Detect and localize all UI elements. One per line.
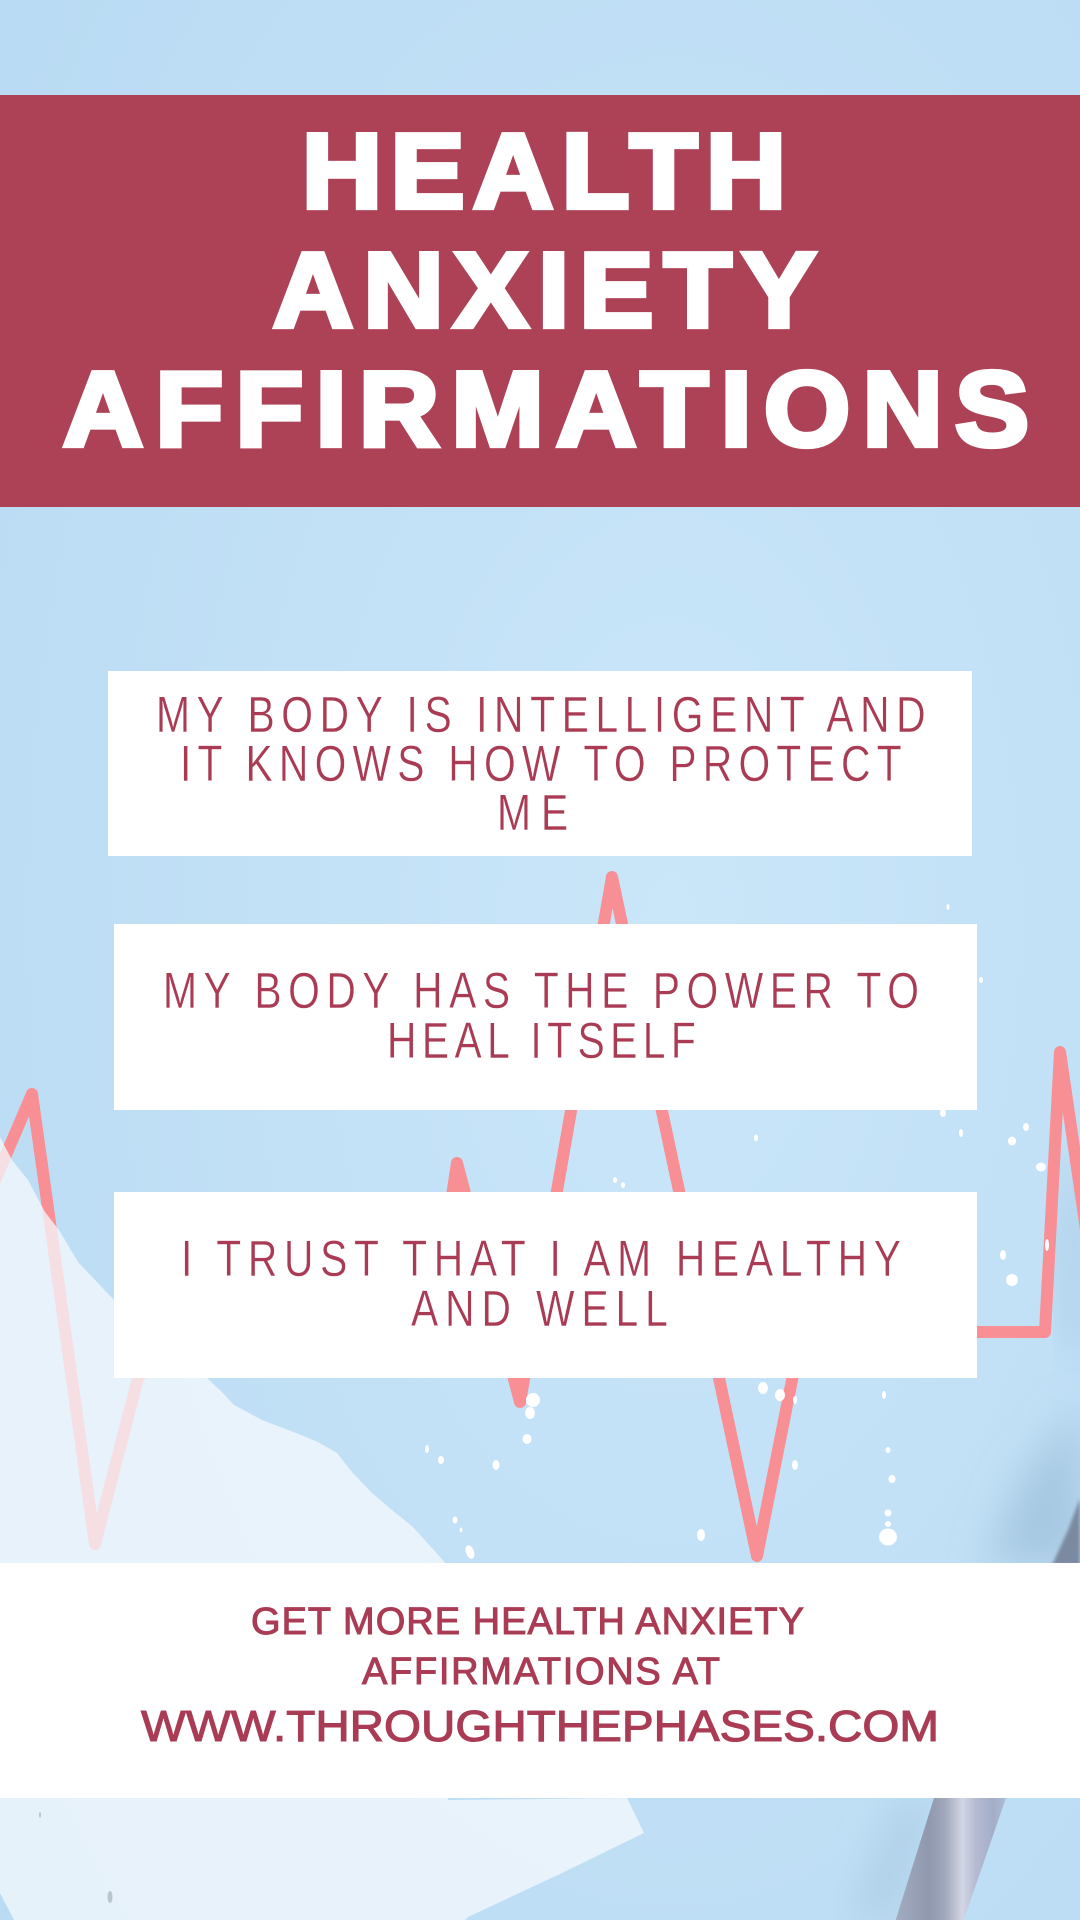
affirmation card 1: MY BODY IS INTELLIGENT AND [156, 686, 926, 743]
stethoscope tube [850, 1795, 1007, 1920]
footer call to action: GET MORE HEALTH ANXIETY [251, 1601, 804, 1643]
affirmation card 2 [114, 924, 977, 1110]
affirmation card 1: IT KNOWS HOW TO PROTECT [180, 735, 902, 792]
title text: HEALTH [302, 112, 786, 230]
title text: ANXIETY [273, 231, 816, 349]
affirmation card 3: AND WELL [411, 1280, 668, 1337]
footer call to action [0, 1563, 1080, 1798]
footer call to action: WWW.THROUGHTHEPHASES.COM [141, 1702, 939, 1751]
title text [63, 112, 1029, 468]
affirmation card 2: HEAL ITSELF [387, 1012, 696, 1069]
specks on paper [39, 1812, 112, 1903]
affirmation card 1 [108, 671, 972, 856]
affirmation card 2: MY BODY HAS THE POWER TO [163, 962, 919, 1019]
title text: AFFIRMATIONS [63, 350, 1029, 468]
torn paper shape [0, 1137, 644, 1920]
affirmation card 1: ME [497, 784, 568, 841]
heartbeat line [0, 877, 1080, 1556]
footer call to action: AFFIRMATIONS AT [362, 1651, 720, 1693]
affirmation card 3 [114, 1192, 977, 1378]
paint splatter dots [425, 904, 1049, 1560]
title banner [0, 95, 1080, 507]
stethoscope shadow at right edge [985, 1130, 1080, 1565]
affirmation card 3: I TRUST THAT I AM HEALTHY [181, 1230, 901, 1287]
